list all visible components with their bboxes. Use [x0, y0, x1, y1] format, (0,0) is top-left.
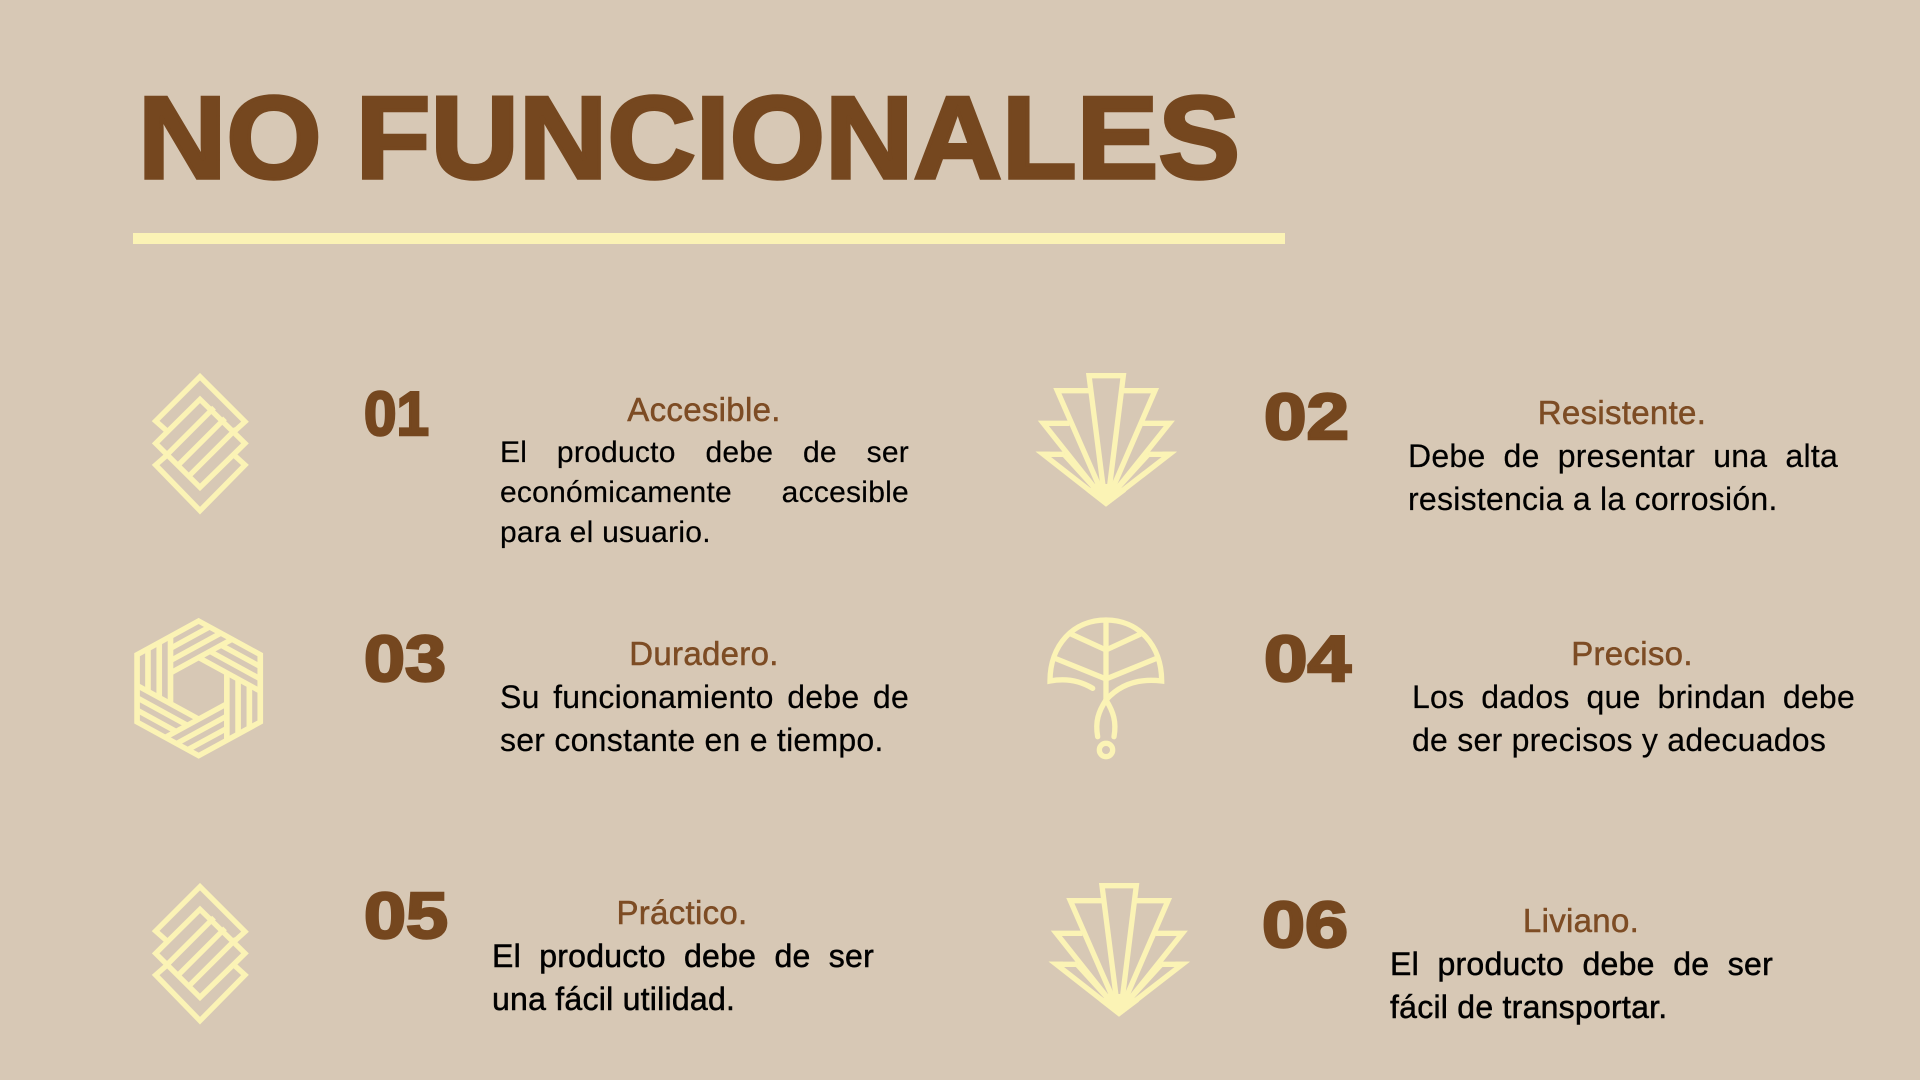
text: Accesible: El producto debe de ser: [500, 436, 909, 469]
number 02: 02: [1264, 380, 1349, 453]
text: Práctico: [492, 938, 874, 1017]
text: Liviano: fácil de transportar.: [1390, 989, 1667, 1025]
panel: 01 accesible: [152, 373, 909, 549]
heading: Liviano: Liviano.: [1523, 902, 1639, 939]
text: Liviano: [1390, 946, 1773, 1025]
panel: 03 duradero: [134, 618, 909, 759]
heading: Duradero: Duradero.: [629, 635, 779, 672]
icon: stacked diamonds: [152, 373, 249, 514]
heading: Preciso: Preciso.: [1571, 635, 1693, 672]
panel: 06 liviano: [1048, 883, 1773, 1025]
text: Resistente: Debe de presentar una alta: [1408, 438, 1838, 474]
panel: 05 practico: [152, 879, 874, 1024]
panel: 04 preciso: [1047, 617, 1855, 760]
text: Resistente: [1408, 438, 1838, 517]
heading: Accesible: Accesible.: [627, 391, 781, 428]
text: Preciso: de ser precisos y adecuados: [1412, 722, 1826, 758]
text: Accesible: económicamente accesible: [500, 476, 909, 509]
text: Accesible: [500, 436, 909, 549]
text: Duradero: ser constante en e tiempo.: [500, 722, 884, 758]
text: Duradero: [500, 679, 909, 758]
icon: art deco fan: [1036, 373, 1177, 506]
text: Preciso: Los dados que brindan debe: [1412, 679, 1855, 715]
title underline: [133, 233, 1285, 244]
number 04: 04: [1264, 622, 1351, 695]
heading: Práctico: Práctico.: [616, 894, 748, 931]
icon: ginkgo leaf: [1047, 617, 1164, 760]
icon: stacked diamonds: [152, 883, 249, 1024]
text: Liviano: El producto debe de ser: [1390, 946, 1773, 982]
heading: Resistente: Resistente.: [1538, 394, 1706, 431]
title: NO FUNCIONALES: [138, 72, 1240, 200]
icon: woven hexagon: [134, 618, 263, 759]
text: Práctico: una fácil utilidad.: [492, 981, 735, 1017]
text: Resistente: resistencia a la corrosión.: [1408, 481, 1778, 517]
text: Preciso: [1412, 679, 1855, 758]
text: Duradero: Su funcionamiento debe de: [500, 679, 909, 715]
icon: art deco fan: [1048, 883, 1190, 1017]
text: Accesible: para el usuario.: [500, 516, 711, 549]
number 05: 05: [364, 879, 448, 952]
number 06: 06: [1262, 888, 1348, 961]
number 03: 03: [364, 622, 446, 695]
number 01: 01: [364, 380, 429, 449]
panel: 02 resistente: [1036, 373, 1838, 517]
text: Práctico: El producto debe de ser: [492, 938, 874, 974]
